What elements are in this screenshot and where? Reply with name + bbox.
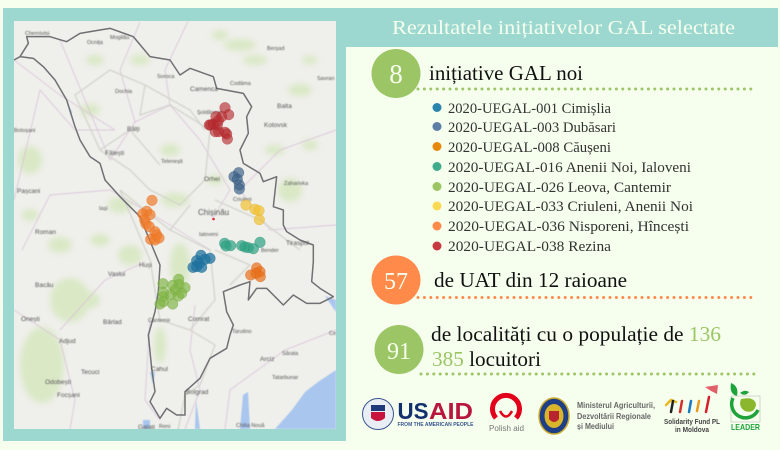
logo: ministry crest xyxy=(539,398,569,434)
map place labels: Focșani xyxy=(57,392,80,399)
map place labels: Sărata xyxy=(282,351,299,357)
text: ministry: și Mediului xyxy=(577,422,614,431)
text: de localități cu o populație de 136 xyxy=(431,322,721,346)
logo: USAID xyxy=(362,398,474,430)
91 localities block: 385 locuitori xyxy=(432,347,541,371)
map place labels: Savran xyxy=(317,76,334,82)
cluster: Anenii Noi, Ialoveni xyxy=(219,237,265,254)
legend: 2020-UEGAL-026 Leova, Cantemir xyxy=(448,180,671,196)
legend: 2020-UEGAL-038 Rezina xyxy=(448,239,611,255)
map place labels xyxy=(14,31,336,431)
cluster: Căușeni xyxy=(245,263,266,282)
map place labels: Galați xyxy=(138,424,155,431)
legend: 2020-UEGAL-033 Criuleni, Anenii Noi xyxy=(448,199,693,215)
map place labels: Odobești xyxy=(45,379,71,386)
map place labels: Ialoveni xyxy=(199,232,218,238)
logos row xyxy=(362,383,760,434)
raion borders xyxy=(75,70,300,430)
logo: Polish aid xyxy=(489,395,524,433)
map place labels: Ocnița xyxy=(87,40,104,46)
cluster: Nisporeni, Hîncești xyxy=(137,195,164,245)
map place labels: Comrat xyxy=(188,316,210,323)
Moldova border xyxy=(14,28,333,418)
heading: inițiative GAL noi xyxy=(429,61,583,85)
legend: 2020-UEGAL-001 Cimișlia xyxy=(448,101,611,117)
map place labels: Ce xyxy=(329,331,336,337)
legend: 2020-UEGAL-008 Căușeni xyxy=(448,140,611,156)
dotted divider xyxy=(418,88,752,90)
map place labels: Bălți xyxy=(127,126,140,133)
map place labels: Fălești xyxy=(105,150,124,157)
text: ministry: Dezvoltării Regionale xyxy=(577,412,651,421)
cluster: Criuleni, Anenii Noi xyxy=(241,200,265,225)
map place labels: Șoldănești xyxy=(197,110,223,116)
map place labels: Bender xyxy=(261,248,279,254)
map place labels: Reni xyxy=(159,424,170,430)
cluster: Rezina xyxy=(204,102,234,144)
dotted divider xyxy=(421,372,756,376)
map place labels: Tecuci xyxy=(81,369,99,376)
map place labels: Cahul xyxy=(151,366,169,373)
map place labels: Dochia xyxy=(115,89,133,95)
map frame xyxy=(3,8,346,441)
map place labels: Roman xyxy=(35,229,56,236)
map place labels: Bolgrad xyxy=(186,389,209,396)
map place labels: Iași xyxy=(99,206,108,212)
map place labels: Zaharivka xyxy=(284,181,309,187)
dotted divider xyxy=(418,296,752,299)
panel: map of Moldova xyxy=(14,21,336,431)
map place labels: Criuleni xyxy=(233,197,252,203)
map place labels: Vaslui xyxy=(108,271,125,278)
cluster: Cimișlia xyxy=(188,250,215,273)
cluster: Leova, Cantemir xyxy=(155,274,190,309)
logo: LEADER: LEADER xyxy=(731,422,760,432)
map place labels: Bârlad xyxy=(103,319,122,326)
badge 91 xyxy=(374,325,424,374)
map place labels: Balta xyxy=(277,103,292,110)
map place labels: Tarutino xyxy=(232,329,252,335)
map place labels: Botoșani xyxy=(14,128,35,134)
map place labels: Pașcani xyxy=(17,188,40,195)
logo: Solidarity Fund: Solidarity Fund PL xyxy=(664,419,721,426)
heading: de UAT din 12 raioane xyxy=(434,268,627,292)
map place labels: Chilia Nouă xyxy=(236,423,265,429)
map place labels: Cantemir xyxy=(148,318,170,324)
rivers and roads xyxy=(14,21,336,429)
map place labels: Kotovsk xyxy=(264,122,288,129)
logo: Polish aid: Polish aid xyxy=(489,424,524,433)
map terrain xyxy=(18,30,318,403)
logo: Solidarity Fund: in Moldova xyxy=(675,427,709,434)
91 localities block xyxy=(374,322,756,374)
map place labels: Telenești xyxy=(161,159,183,165)
map place labels: Chernivtsi xyxy=(25,31,49,37)
map place labels: Codâma xyxy=(230,81,252,87)
badge 57: 57 xyxy=(384,269,408,295)
map place labels: Adjud xyxy=(59,338,76,345)
logo: Solidarity Fund xyxy=(664,385,721,434)
map place labels: Berșad xyxy=(267,46,284,52)
map place labels: Chișinău xyxy=(198,208,229,217)
map place labels: Camenca xyxy=(190,86,218,93)
map place labels: Huși xyxy=(139,262,152,269)
57 UAT block xyxy=(372,256,752,304)
badge 8: 8 xyxy=(389,59,403,89)
map place labels: Bacău xyxy=(35,282,54,289)
map place labels: Mogilău xyxy=(110,35,129,41)
title: Rezultatele inițiativelor GAL selectate xyxy=(392,17,735,39)
header banner xyxy=(346,8,778,47)
legend xyxy=(432,101,693,255)
text: ministry: Ministerul Agriculturii, xyxy=(577,401,655,410)
map place labels: Soroca xyxy=(157,74,175,80)
logo: USAID: AID xyxy=(429,398,473,424)
badge 8 xyxy=(372,49,420,98)
logo: LEADER xyxy=(731,383,760,432)
red dot Chisinau xyxy=(212,218,215,220)
map place labels: Tiraspol xyxy=(286,240,309,247)
legend: 2020-UEGAL-036 Nisporeni, Hîncești xyxy=(448,219,689,235)
map place labels: Arciz xyxy=(260,356,274,363)
badge 57 xyxy=(372,256,420,304)
legend: 2020-UEGAL-003 Dubăsari xyxy=(448,120,616,136)
map place labels: Onești xyxy=(21,316,40,323)
cluster: Dubăsari xyxy=(229,167,245,194)
text: ministry xyxy=(577,401,655,431)
8 initiatives block xyxy=(372,49,752,98)
map place labels: Tatarbunar xyxy=(272,375,298,381)
map place labels: Orhei xyxy=(204,176,220,183)
logo: USAID: US xyxy=(398,398,428,424)
sea and lakes xyxy=(68,105,336,429)
legend: 2020-UEGAL-016 Anenii Noi, Ialoveni xyxy=(448,160,691,176)
badge 91: 91 xyxy=(387,339,411,365)
logo: USAID: FROM THE AMERICAN PEOPLE xyxy=(398,422,474,428)
